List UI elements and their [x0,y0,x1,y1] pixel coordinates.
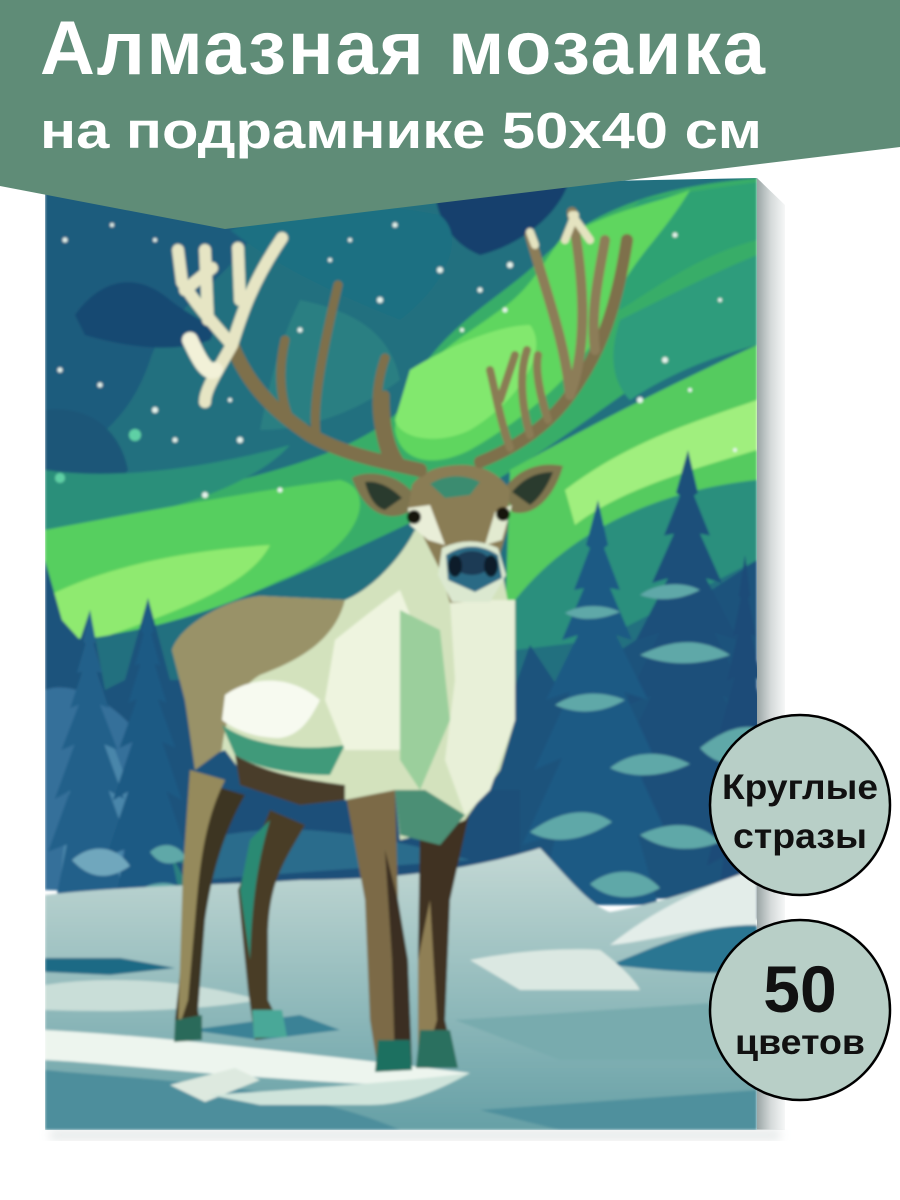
pine trees [48,450,782,920]
aurora bands [178,178,757,590]
badge: 50 colors: 50 [763,952,837,1026]
painting: reindeer under northern lights [45,170,782,1130]
snow ground [45,848,757,1130]
stars [55,212,737,498]
top banner [0,0,900,229]
badge: round rhinestones: Круглые [722,768,878,807]
antlers [178,212,627,470]
badge: round rhinestones: стразы [733,817,867,856]
title: Алмазная мозаика [40,6,766,91]
forest background [45,560,757,900]
badge: 50 colors: цветов [735,1023,865,1062]
canvas side shadow [50,178,785,1140]
legs [174,770,470,1072]
badge: 50 colors [710,920,890,1100]
head [352,465,563,603]
sky background [45,178,757,692]
badge: round rhinestones [710,715,890,895]
subtitle: на подрамнике 50х40 см [40,102,762,159]
reindeer [172,212,627,1072]
snow on pines [72,584,757,908]
body [220,529,516,842]
